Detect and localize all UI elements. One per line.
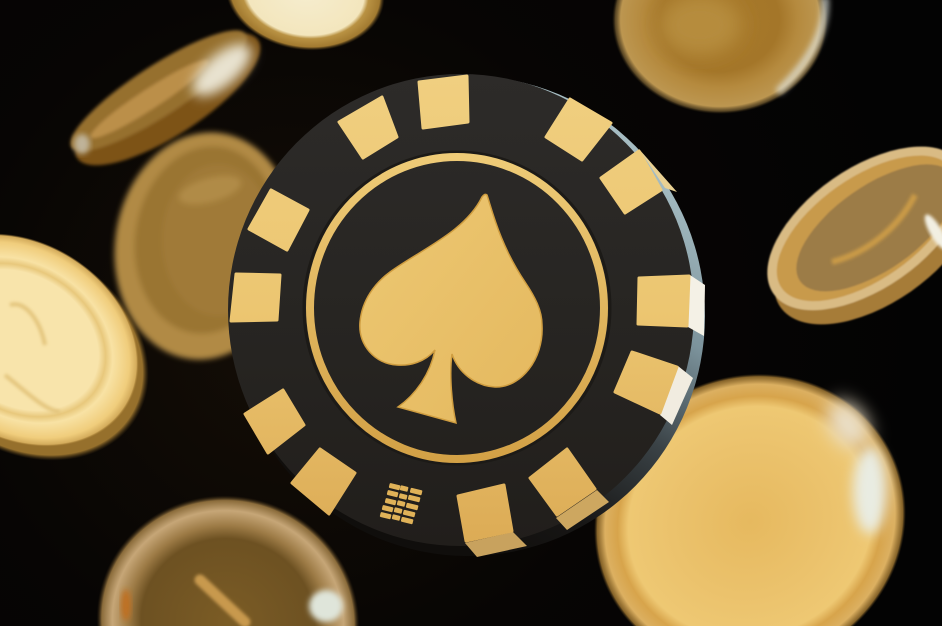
inner ring xyxy=(304,152,610,464)
poker chip xyxy=(228,74,705,557)
chip edge xyxy=(231,76,705,556)
coin: bottom left xyxy=(92,492,360,626)
coin: top centre xyxy=(222,0,390,54)
chip face xyxy=(228,74,694,546)
coin: right tilted xyxy=(737,113,942,358)
coin: top left small xyxy=(57,9,278,188)
coin: top right xyxy=(608,0,832,116)
icon: microchip grid xyxy=(380,483,423,524)
coin: left middle xyxy=(100,121,310,371)
spade symbol xyxy=(360,194,542,423)
coin: bottom right xyxy=(590,368,908,626)
coin: far left xyxy=(0,230,165,475)
chip edge stripes xyxy=(465,149,705,557)
gold chip inlays xyxy=(231,76,689,541)
